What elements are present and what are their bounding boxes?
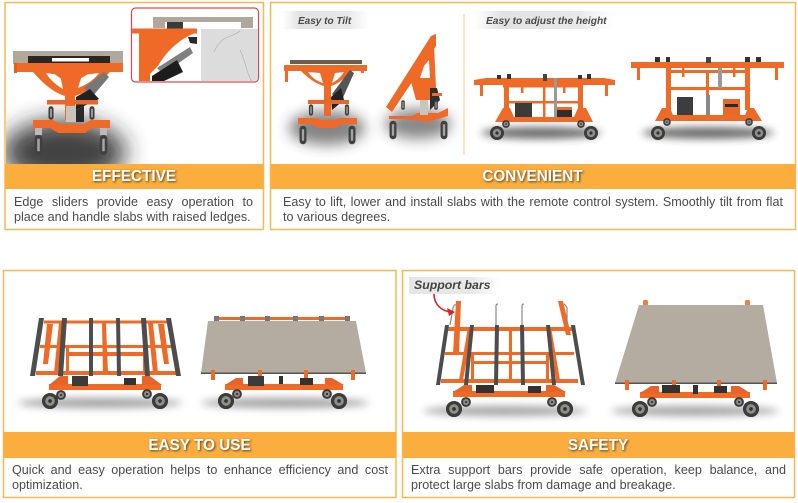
heading: safety: SAFETY xyxy=(568,437,628,454)
cart: with slab xyxy=(201,316,366,409)
label background: adjust the height xyxy=(474,11,614,29)
shadows xyxy=(289,109,774,145)
floor shadow xyxy=(2,120,126,184)
heading: effective: EFFECTIVE xyxy=(92,168,176,185)
text: effective xyxy=(14,195,253,224)
band: convenient xyxy=(270,164,796,189)
cart: frame top view xyxy=(30,318,181,409)
inset: edge slider detail xyxy=(132,8,259,83)
panel: easy to use xyxy=(4,270,396,498)
text: convenient xyxy=(283,195,783,224)
cart: with large slab xyxy=(615,300,777,417)
panel: safety xyxy=(402,270,794,498)
label: easy to tilt: Easy to Tilt xyxy=(298,16,352,27)
heading: convenient: CONVENIENT xyxy=(482,168,583,185)
shadows xyxy=(18,398,182,408)
heading: easy to use: EASY TO USE xyxy=(148,437,251,454)
band: effective xyxy=(5,164,264,189)
text: effective: place and handle slabs with raised ledges. xyxy=(14,210,251,224)
text: easy to use xyxy=(12,463,388,492)
panel: effective xyxy=(2,2,264,230)
label background: easy to tilt xyxy=(282,11,370,29)
text: safety: protect large slabs from damage and breakage. xyxy=(411,478,676,492)
arrow: support bar pointer xyxy=(434,294,455,316)
band: safety xyxy=(402,432,794,458)
text: safety: Extra support bars provide safe operation, keep balance, and xyxy=(411,463,786,477)
label: easy to adjust the height: Easy to adjust the height xyxy=(486,16,607,27)
cart: frame with support bars xyxy=(436,301,585,417)
text: easy to use: optimization. xyxy=(12,478,83,492)
cart: raised height xyxy=(631,57,784,140)
cart: tilt flat xyxy=(284,60,367,144)
cart: low height xyxy=(474,74,615,140)
label background: support bars xyxy=(409,277,501,294)
cart: front view with slab xyxy=(13,51,123,155)
text: convenient: to various degrees. xyxy=(283,210,390,224)
band: easy to use xyxy=(4,432,396,458)
text: safety xyxy=(411,463,786,492)
text: effective: Edge sliders provide easy operation to xyxy=(14,195,253,209)
label: support bars: Support bars xyxy=(414,278,491,292)
cart: tilted xyxy=(386,34,448,139)
shadows xyxy=(423,406,587,416)
text: easy to use: Quick and easy operation helps to enhance efficiency and cost xyxy=(12,463,388,477)
text: convenient: Easy to lift, lower and install slabs with the remote control system. Smoothly tilt from flat xyxy=(283,195,783,209)
panel: convenient xyxy=(270,2,796,230)
divider xyxy=(464,14,465,155)
